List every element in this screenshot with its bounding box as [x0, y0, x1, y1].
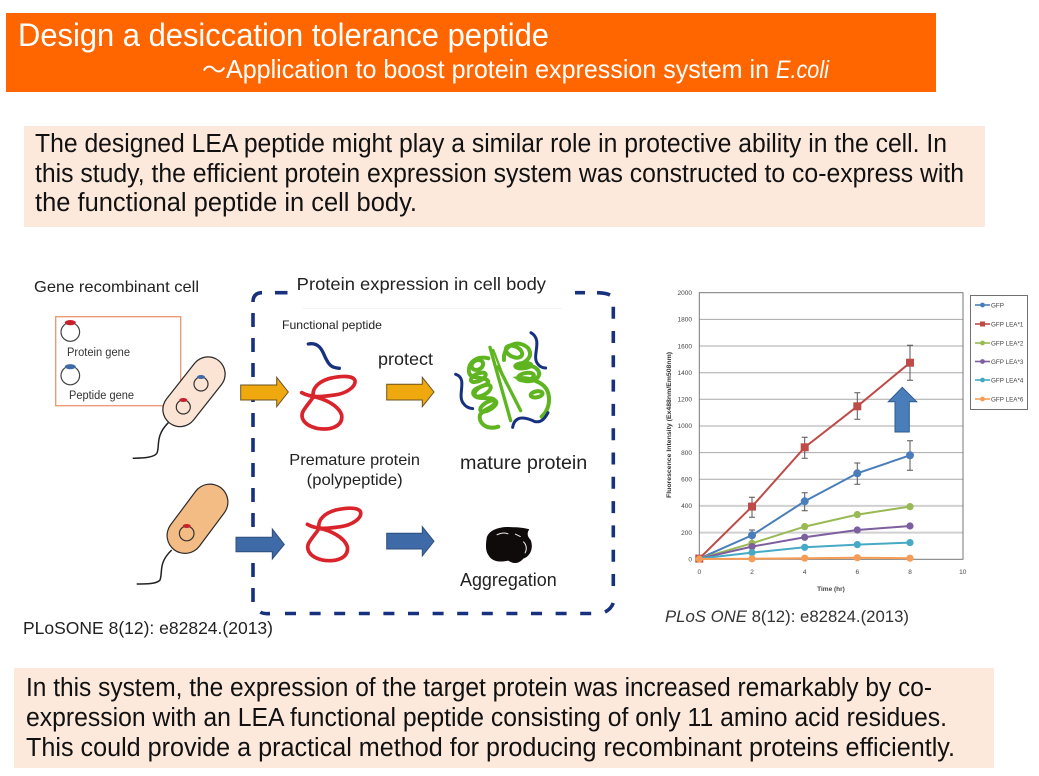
arrow: to aggregation	[387, 527, 434, 556]
series: GFP LEA*3	[699, 522, 914, 559]
y axis tick labels: 1800	[678, 317, 692, 324]
mature protein illustration	[456, 333, 549, 428]
series: GFP LEA*2	[699, 503, 914, 559]
y axis tick labels: 1200	[678, 397, 692, 404]
panel: introduction text: this study, the efficient protein expression system was constructed to co-express with	[35, 160, 964, 188]
chart legend	[970, 296, 1028, 410]
chart legend: GFP LEA*6	[991, 396, 1024, 403]
panel: gene recombinant cells	[34, 279, 210, 584]
arrow: yellow to protein expression	[241, 377, 288, 407]
y axis tick labels: 400	[681, 503, 692, 510]
label: premature protein: Premature protein	[289, 452, 420, 469]
arrow: increase	[888, 387, 917, 432]
x axis tick labels: 4	[803, 569, 807, 576]
y axis title: Fluorescence Intensity (Ex488nm/Em508nm)	[666, 352, 673, 498]
cell with protein plasmid only	[137, 502, 210, 584]
series: GFP LEA*6	[696, 554, 914, 563]
subtitle: ～	[202, 57, 226, 84]
x axis tick labels: 2	[750, 569, 754, 576]
arrow: protect	[387, 377, 434, 407]
series: GFP LEA*4	[699, 539, 914, 559]
panel: introduction text: The designed LEA peptide might play a similar role in protective ability in the cell. In	[35, 130, 947, 158]
header banner	[6, 13, 936, 92]
legend box: plasmids: Peptide gene	[69, 390, 134, 402]
y axis tick labels: 1000	[678, 423, 692, 430]
x axis tick labels: 0	[697, 569, 701, 576]
panel: conclusion text: This could provide a practical method for producing recombinant proteins efficiently.	[26, 734, 955, 762]
aggregation blob	[486, 527, 532, 563]
functional peptide strand and premature protein	[302, 344, 355, 429]
heading: protein expression: Protein expression in cell body	[297, 274, 546, 294]
panel: conclusion text	[14, 668, 994, 768]
x axis tick labels: 8	[908, 569, 912, 576]
chart legend: GFP LEA*2	[991, 340, 1024, 347]
citation: right: PLoS ONE 8(12): e82824.(2013)	[665, 607, 909, 626]
legend box: plasmids: Protein gene	[67, 347, 130, 359]
title: Design a desiccation tolerance peptide	[18, 17, 549, 53]
label: functional peptide: Functional peptide	[282, 318, 382, 332]
line chart: fluorescence intensity over time	[666, 290, 1028, 593]
chart legend: GFP LEA*1	[991, 321, 1024, 328]
panel: protein expression in cell body	[253, 274, 613, 614]
label: premature protein: (polypeptide)	[307, 472, 403, 489]
y axis tick labels: 600	[681, 476, 692, 484]
plot frame	[699, 293, 963, 559]
y axis tick labels	[678, 290, 692, 564]
arrow: blue to protein expression	[236, 529, 284, 559]
series: GFP	[699, 451, 914, 559]
heading: gene recombinant cell: Gene recombinant cell	[34, 279, 199, 296]
chart legend: GFP LEA*3	[991, 359, 1024, 366]
panel: conclusion text: expression with an LEA functional peptide consisting of only 11 amino acid residues.	[26, 704, 947, 732]
y axis tick labels: 1400	[678, 370, 692, 377]
chart legend: GFP LEA*4	[991, 377, 1024, 384]
dashed border	[253, 293, 613, 614]
panel: introduction text: the functional peptide in cell body.	[35, 189, 417, 217]
y axis tick labels: 1600	[678, 343, 692, 350]
panel: conclusion text: In this system, the expression of the target protein was increased remarkably by co-	[26, 674, 932, 702]
subtitle: Application to boost protein expression system in	[226, 54, 769, 84]
label: aggregation: Aggregation	[460, 570, 557, 590]
cell with both plasmids	[133, 374, 208, 458]
label: mature protein: mature protein	[460, 453, 587, 474]
chart legend: GFP	[991, 302, 1004, 309]
series: GFP LEA*1	[695, 359, 914, 563]
x axis title: Time (hr)	[817, 586, 845, 593]
subtitle: E.coli	[776, 56, 830, 84]
y axis tick labels: 0	[688, 556, 692, 564]
x axis tick labels: 10	[959, 569, 967, 576]
x axis tick labels: 6	[855, 569, 859, 576]
label: protect: protect	[378, 349, 433, 369]
y axis tick labels: 200	[681, 530, 692, 537]
label: premature protein	[289, 452, 420, 489]
legend box: plasmids	[56, 317, 181, 406]
y axis tick labels: 800	[681, 450, 692, 457]
panel: introduction text	[24, 126, 985, 227]
plot gridlines	[699, 319, 963, 533]
y axis tick labels: 2000	[678, 290, 692, 297]
premature protein without peptide	[307, 508, 361, 561]
citation: left: PLoSONE 8(12): e82824.(2013)	[23, 618, 273, 638]
error bars	[749, 345, 913, 543]
x axis tick labels	[697, 569, 967, 576]
